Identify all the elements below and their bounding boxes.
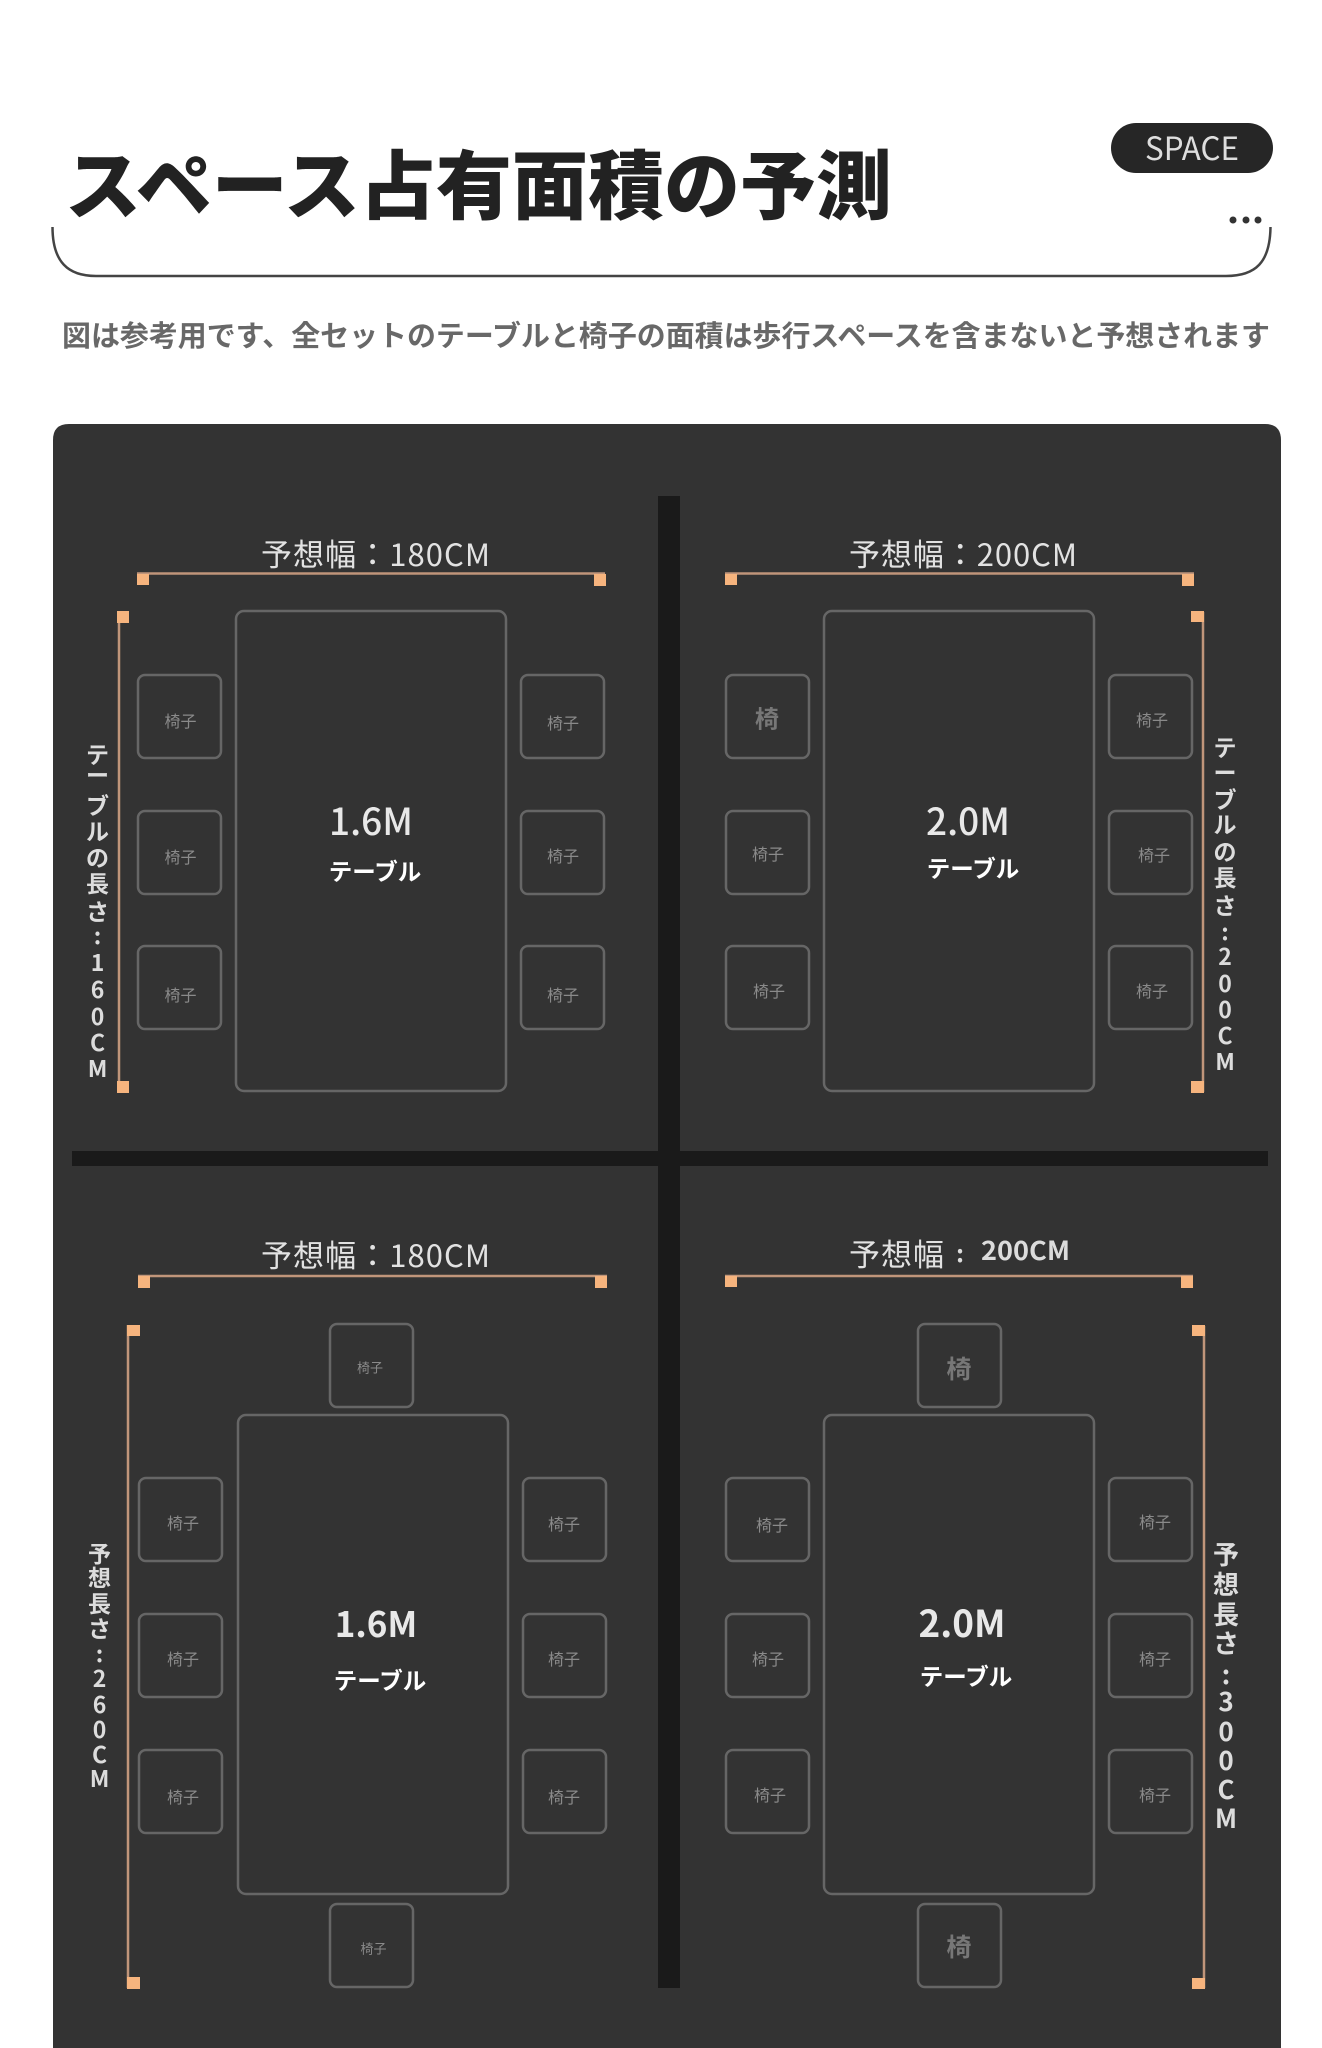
chair: 椅子 (548, 1511, 580, 1535)
length bracket (117, 611, 129, 1093)
chair: 椅子 (753, 978, 785, 1002)
subtitle: 図は参考用です、全セットのテーブルと椅子の面積は歩行スペースを含まないと予想されます (62, 313, 1270, 355)
chair: 椅子 (548, 1646, 580, 1670)
length label: : (1221, 913, 1229, 947)
length label: C (92, 1736, 107, 1770)
length label: 0 (1218, 1740, 1234, 1778)
length label: : (1222, 1654, 1230, 1692)
length bracket (1191, 611, 1204, 1093)
chair (918, 1904, 1001, 1987)
chair (918, 1324, 1001, 1407)
chair: 椅 (946, 1350, 972, 1386)
table label: テーブル (329, 853, 421, 887)
chair: 椅子 (164, 982, 197, 1006)
chair (138, 946, 221, 1029)
chair: 椅子 (164, 844, 197, 868)
chair (1109, 946, 1192, 1029)
length label: 2 (93, 1660, 106, 1694)
chair: 椅子 (752, 841, 784, 865)
chair (330, 1904, 413, 1987)
length label: 6 (91, 971, 104, 1005)
chair: 椅 (946, 1928, 972, 1964)
icon: three dots (1230, 216, 1262, 224)
table size: 2.0M (918, 1594, 1006, 1648)
chair: 椅子 (548, 1784, 580, 1808)
chair (726, 946, 809, 1029)
length label: 長 (88, 1585, 111, 1619)
length label: テ (1214, 729, 1236, 763)
length label: 1 (91, 944, 104, 978)
chair: 椅子 (357, 1358, 383, 1376)
chair (726, 675, 809, 758)
width bracket (725, 1276, 1193, 1288)
length label: 長 (1214, 859, 1236, 893)
width bracket (137, 574, 606, 586)
length label: C (90, 1024, 105, 1058)
divider: vertical (658, 496, 680, 1988)
width label: 予想幅：180CM (261, 530, 490, 575)
chair (138, 811, 221, 894)
length label: 長 (1213, 1594, 1239, 1632)
length label: ー (86, 756, 109, 790)
chair (1109, 1750, 1192, 1833)
badge: SPACE (1111, 123, 1273, 173)
chair (1109, 675, 1192, 758)
length label: M (88, 1050, 107, 1084)
chair (523, 1614, 606, 1697)
width bracket (138, 1276, 607, 1288)
chair: 椅子 (1139, 1509, 1171, 1533)
length label: 長 (86, 865, 109, 899)
length label: の (1214, 833, 1236, 867)
table size: 2.0M (926, 792, 1010, 846)
chair: 椅子 (1136, 978, 1168, 1002)
length label: さ (88, 1610, 111, 1644)
panel: 1.6M table, 8 chairs (88, 1231, 607, 1989)
chair: 椅子 (547, 710, 579, 734)
length label: 0 (91, 998, 104, 1032)
chair (139, 1478, 222, 1561)
length label: : (94, 917, 101, 951)
table (238, 1415, 508, 1894)
chair (139, 1614, 222, 1697)
chair: 椅子 (547, 982, 579, 1006)
chair: 椅子 (754, 1782, 786, 1806)
length label: 0 (1218, 991, 1232, 1025)
length label: ブ (86, 787, 109, 821)
length label: M (1215, 1043, 1235, 1077)
chair (726, 1614, 809, 1697)
length label: ー (1214, 754, 1236, 788)
chair (521, 946, 604, 1029)
width label: 予想幅：200CM (849, 530, 1077, 575)
width bracket (725, 574, 1194, 586)
length label: の (86, 839, 109, 873)
chair: 椅 (755, 700, 779, 734)
chair: 椅子 (1139, 1646, 1171, 1670)
width label: 200CM (981, 1231, 1070, 1268)
length bracket (127, 1325, 140, 1989)
length label: ル (86, 813, 109, 847)
length label: ブ (1214, 781, 1236, 815)
chair (139, 1750, 222, 1833)
panel: dark floor plan board (53, 424, 1281, 2048)
table size: 1.6M (329, 792, 413, 846)
length label: ル (1214, 806, 1236, 840)
chair: 椅子 (167, 1784, 199, 1808)
length label: さ (1213, 1624, 1239, 1660)
chair (330, 1324, 413, 1407)
chair: 椅子 (167, 1646, 199, 1670)
length label: さ (86, 893, 109, 927)
length label: M (90, 1760, 109, 1794)
length label: さ (1214, 887, 1236, 921)
chair (1109, 1614, 1192, 1697)
table (824, 1415, 1094, 1894)
length label: 2 (1218, 938, 1232, 972)
chair (726, 1750, 809, 1833)
table (824, 611, 1094, 1091)
length label: テ (86, 736, 109, 770)
length label: 想 (88, 1559, 111, 1593)
length label: 予 (88, 1535, 111, 1569)
chair: 椅子 (360, 1938, 387, 1958)
chair: 椅子 (1136, 707, 1168, 731)
width label: 予想幅 (849, 1230, 944, 1275)
chair: 椅子 (164, 708, 197, 732)
chair (1109, 811, 1192, 894)
chair: 椅子 (756, 1512, 788, 1536)
length label: 0 (1218, 965, 1232, 999)
chair: 椅子 (1139, 1782, 1171, 1806)
chair (1109, 1478, 1192, 1561)
panel: 1.6M table, 6 chairs (86, 530, 606, 1093)
chair: 椅子 (547, 843, 579, 867)
chair (523, 1750, 606, 1833)
header underline curve (52, 227, 1270, 276)
title: スペース占有面積の予測 (65, 126, 892, 235)
chair (138, 675, 221, 758)
table (236, 611, 506, 1091)
panel: 2.0M table, 6 chairs (725, 530, 1236, 1093)
panel: 2.0M table, 8 chairs (725, 1230, 1239, 1989)
length label: 想 (1213, 1564, 1239, 1602)
badge: SPACE: SPACE (1145, 124, 1239, 170)
length label: C (1217, 1770, 1235, 1806)
width label: 予想幅：180CM (261, 1231, 490, 1276)
width label: : (956, 1234, 964, 1269)
table label: テーブル (927, 850, 1019, 884)
length label: 6 (93, 1686, 106, 1720)
divider: horizontal (72, 1151, 1268, 1166)
chair: 椅子 (1138, 842, 1170, 866)
length label: 0 (1218, 1712, 1234, 1748)
length label: 0 (93, 1711, 106, 1745)
length label: 3 (1218, 1682, 1234, 1718)
table label: テーブル (334, 1662, 426, 1696)
chair (521, 811, 604, 894)
chair: 椅子 (752, 1646, 784, 1670)
chair (523, 1478, 606, 1561)
chair (726, 1478, 809, 1561)
chair (521, 675, 604, 758)
length label: C (1217, 1017, 1233, 1051)
chair (726, 811, 809, 894)
width label (849, 1230, 1070, 1275)
length label: : (96, 1635, 103, 1669)
table label: テーブル (920, 1658, 1012, 1692)
chair: 椅子 (167, 1510, 199, 1534)
length bracket (1192, 1325, 1205, 1989)
table size: 1.6M (335, 1597, 417, 1648)
length label: M (1215, 1798, 1237, 1836)
length label: 予 (1213, 1534, 1239, 1572)
